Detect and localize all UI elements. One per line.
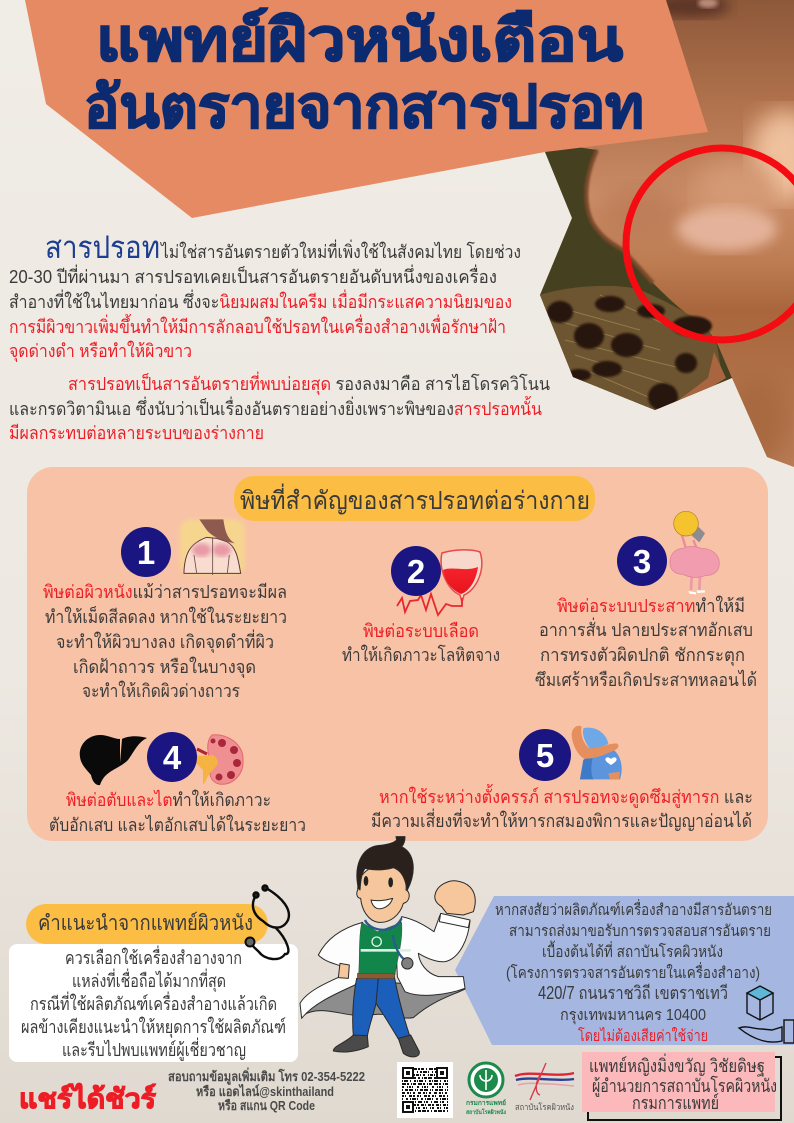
icon: pregnant woman [572, 726, 622, 779]
text: skin toxicity [43, 582, 287, 701]
number 3: 3 [633, 543, 651, 580]
stethoscope neck [365, 918, 405, 960]
blue panel: testing information: เบื้องต้นได้ที่ สถาบันโรคผิวหนัง [542, 940, 723, 961]
panel heading: พิษที่สำคัญของสารปรอทต่อร่างกาย [240, 483, 590, 515]
number 3 [617, 536, 667, 586]
advice box: และรีบไปพบแพทย์ผู้เชี่ยวชาญ [62, 1037, 246, 1061]
text: liver and kidney toxicity: ตับอักเสบ และไตอักเสบได้ในระยะยาว [49, 814, 306, 835]
logo: Department of Medical Services: สถาบันโรคผิวหนัง [466, 1108, 506, 1116]
olive backdrop left of jaw [530, 140, 732, 415]
logo: Department of Medical Services: กรมการแพทย์ [466, 1099, 506, 1107]
photo: skin patch on chin [530, 0, 794, 470]
text: nervous system toxicity: ซึมเศร้าหรือเกิดประสาทหลอนได้ [535, 669, 757, 690]
advice heading: คำแนะนำจากแพทย์ผิวหนัง [38, 911, 253, 935]
cuff [439, 913, 470, 928]
text: blood toxicity [342, 621, 500, 665]
blue panel: testing information: โดยไม่ต้องเสียค่าใช้จ่าย [578, 1027, 708, 1045]
advice box: ผลข้างเคียงแนะนำให้หยุดการใช้ผลิตภัณฑ์ [21, 1016, 286, 1038]
advice box: กรณีที่ใช้ผลิตภัณฑ์เครื่องสำอางแล้วเกิด [30, 991, 277, 1014]
title banner [25, 0, 708, 218]
number 1: 1 [137, 534, 155, 571]
icon: stethoscope [246, 886, 289, 959]
item 1: skin [43, 519, 287, 701]
icon: box on hand [739, 986, 794, 1043]
advice box: ควรเลือกใช้เครื่องสำอางจาก [65, 945, 242, 968]
blue panel: testing information: 420/7 ถนนราชวิถี เขตราชเทวี [538, 983, 728, 1003]
logo: Institute of Dermatology: สถาบันโรคผิวหนัง [515, 1102, 574, 1112]
share label: แชร์ได้ชัวร์ [19, 1083, 157, 1114]
title: อันตรายจากสารปรอท [84, 75, 644, 140]
advice heading [26, 904, 268, 944]
number 5: 5 [536, 737, 554, 774]
shirt [358, 922, 402, 977]
intro paragraph: 20-30 ปีที่ผ่านมา สารปรอทเคยเป็นสารอันตรายอันดับหนึ่งของเครื่อง [9, 264, 497, 287]
coat left side [300, 922, 363, 1018]
text: blood toxicity: พิษต่อระบบเลือด [363, 621, 479, 641]
number 5 [519, 729, 571, 781]
text: pregnancy risk: หากใช้ระหว่างตั้งครรภ์ สารปรอทจะดูดซึมสู่ทารก และ [379, 784, 753, 808]
intro paragraph: สารปรอทเป็นสารอันตรายที่พบบ่อยสุด รองลงมาคือ สารไฮโดรควิโนน [68, 371, 550, 395]
hair [357, 837, 413, 890]
text: skin toxicity: จะทำให้เกิดผิวด่างถาวร [82, 680, 240, 701]
contact information [168, 1067, 365, 1113]
intro paragraph: สารปรอท [45, 230, 160, 265]
shoes [333, 1035, 368, 1052]
icon: back with skin rash [180, 519, 245, 575]
advice box: แหล่งที่เชื่อถือได้มากที่สุด [72, 968, 226, 992]
belt [357, 973, 395, 979]
leopard fabric [540, 286, 722, 415]
blue panel: testing information [455, 896, 794, 1045]
advice box [9, 944, 298, 1062]
text: blood toxicity: ทำให้เกิดภาวะโลหิตจาง [342, 644, 500, 665]
item 2: blood [342, 546, 500, 665]
number 2 [391, 546, 441, 596]
text: nervous system toxicity: พิษต่อระบบประสาททำให้มี [557, 595, 745, 616]
intro paragraph: สำอางที่ใช้ในไทยมาก่อน ซึ่งจะนิยมผสมในครีม เมื่อมีกระแสความนิยมของ [9, 289, 512, 312]
intro paragraph: จุดด่างดำ หรือทำให้ผิวขาว [9, 340, 192, 362]
icon: liver [80, 735, 147, 785]
icon: kidney [195, 735, 243, 784]
title: แพทย์ผิวหนังเตือน [96, 7, 623, 73]
coat right side and raised arm [396, 915, 470, 995]
intro paragraph: การมีผิวขาวเพิ่มขึ้นทำให้มีการลักลอบใช้ปรอทในเครื่องสำอางเพื่อรักษาฝ้า [9, 314, 506, 337]
icon: blood bag with heartbeat [397, 550, 482, 615]
text: nervous system toxicity: อาการสั่น ปลายประสาทอักเสบ [539, 617, 753, 640]
number 4: 4 [163, 739, 182, 776]
text: pregnancy risk: มีความเสี่ยงที่จะทำให้ทารกสมองพิการและปัญญาอ่อนได้ [371, 808, 752, 831]
contact information: สอบถามข้อมูลเพิ่มเติม โทร 02-354-5222 [168, 1067, 365, 1085]
text: skin toxicity: ทำให้เม็ดสีลดลง หากใช้ในระยะยาว [45, 605, 287, 627]
text: liver and kidney toxicity: พิษต่อตับและไตทำให้เกิดภาวะ [66, 789, 271, 810]
panel heading [234, 476, 595, 521]
hand at hip [338, 963, 349, 978]
intro paragraph: และกรดวิตามินเอ ซึ่งนับว่าเป็นเรื่องอันตรายอย่างยิ่งเพราะพิษของสารปรอทนั้น [9, 396, 542, 419]
text: nervous system toxicity [535, 595, 757, 690]
intro paragraph: ไม่ใช่สารอันตรายตัวใหม่ที่เพิ่งใช้ในสังคมไทย โดยช่วง [159, 239, 521, 262]
panel: toxic effects [27, 467, 768, 841]
blue panel: testing information: กรุงเทพมหานคร 10400 [560, 1007, 706, 1025]
eyes and smile [364, 876, 368, 886]
text: liver and kidney toxicity [49, 789, 306, 835]
text: skin toxicity: จะทำให้ผิวบางลง เกิดจุดดำที่ผิว [56, 629, 274, 653]
intro paragraph [9, 230, 550, 443]
number 1 [121, 527, 171, 577]
left leg [353, 978, 378, 1037]
red circle highlight [626, 148, 794, 340]
cape [303, 980, 465, 1018]
item 3: nervous system [535, 511, 757, 690]
face [357, 866, 409, 922]
right leg [375, 975, 410, 1039]
item 5: pregnancy [371, 726, 753, 831]
logo: Department of Medical Services [466, 1063, 506, 1116]
logo: Institute of Dermatology [515, 1063, 574, 1112]
director credit box [582, 1052, 781, 1120]
director credit box: กรมการแพทย์ [632, 1093, 719, 1113]
QR code [397, 1062, 453, 1118]
text: skin toxicity: เกิดฝ้าถาวร หรือในบางจุด [73, 656, 256, 678]
number 4 [147, 732, 197, 782]
text: pregnancy risk [371, 784, 753, 831]
doctor mascot [300, 837, 475, 1057]
raised fist [435, 881, 475, 915]
contact information: หรือ แอดไลน์@skinthailand [196, 1083, 334, 1099]
blue panel: testing information: (โครงการตรวจสารอันตรายในเครื่องสำอาง) [506, 962, 760, 982]
intro paragraph: มีผลกระทบต่อหลายระบบของร่างกาย [9, 423, 264, 443]
text: skin toxicity: พิษต่อผิวหนังแม้ว่าสารปรอทจะมีผล [43, 582, 287, 602]
number 2: 2 [407, 553, 425, 590]
text: nervous system toxicity: การทรงตัวผิดปกติ ชักกระตุก [540, 645, 745, 666]
contact information: หรือ สแกน QR Code [218, 1098, 315, 1113]
item 4: liver and kidney [49, 732, 306, 835]
icon: brain with light bulb [670, 511, 719, 594]
